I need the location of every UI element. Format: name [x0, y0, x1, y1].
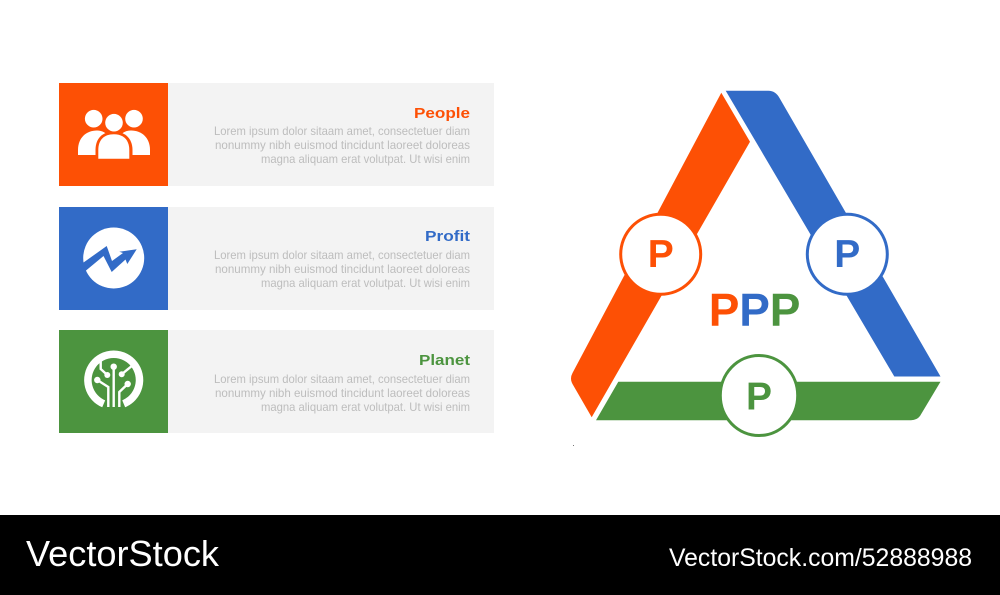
text block: people: nonummy nibh euismod tincidunt laoreet doloreas [215, 138, 470, 152]
center label: PPP [709, 284, 800, 336]
footer url: VectorStock.com/52888988 [669, 544, 972, 572]
footer logo: VectorStock [26, 533, 220, 574]
panel: planet [59, 330, 494, 433]
text block: profit: magna aliquam erat volutpat. Ut wisi enim [261, 276, 470, 290]
icon: circuit tree [88, 354, 140, 407]
text block: planet: magna aliquam erat volutpat. Ut wisi enim [261, 400, 470, 414]
text block: profit: Lorem ipsum dolor sitaam amet, consectetuer diam [214, 248, 470, 262]
node: green P: P [746, 376, 772, 418]
panel: people [59, 83, 494, 186]
triangle diagram [571, 91, 940, 436]
text block: people [214, 124, 470, 166]
band: blue [726, 91, 940, 377]
footer bar [0, 515, 1000, 595]
text block: people: magna aliquam erat volutpat. Ut wisi enim [261, 152, 470, 166]
text block: profit [214, 248, 470, 290]
node: orange P: P [648, 233, 674, 276]
icon: growth chart [80, 228, 144, 288]
speck [573, 445, 574, 446]
panel: profit [59, 207, 494, 310]
icon: people group [78, 110, 150, 162]
heading: planet: Planet [419, 352, 470, 369]
heading: people: People [414, 105, 470, 122]
node: blue P [807, 214, 887, 294]
center label: PPP: P [739, 284, 770, 336]
text block: planet: nonummy nibh euismod tincidunt laoreet doloreas [215, 386, 470, 400]
text block: profit: nonummy nibh euismod tincidunt laoreet doloreas [215, 262, 470, 276]
text block: people: Lorem ipsum dolor sitaam amet, consectetuer diam [214, 124, 470, 138]
node: orange P [621, 214, 701, 294]
center label: PPP: P [709, 284, 739, 336]
heading: profit: Profit [425, 228, 470, 245]
node: blue P: P [834, 233, 860, 276]
node: green P [720, 356, 798, 436]
band: green [596, 382, 940, 420]
text block: planet: Lorem ipsum dolor sitaam amet, consectetuer diam [214, 372, 470, 386]
text block: planet [214, 372, 470, 414]
center label: PPP: P [770, 284, 800, 336]
band: orange [571, 93, 750, 417]
